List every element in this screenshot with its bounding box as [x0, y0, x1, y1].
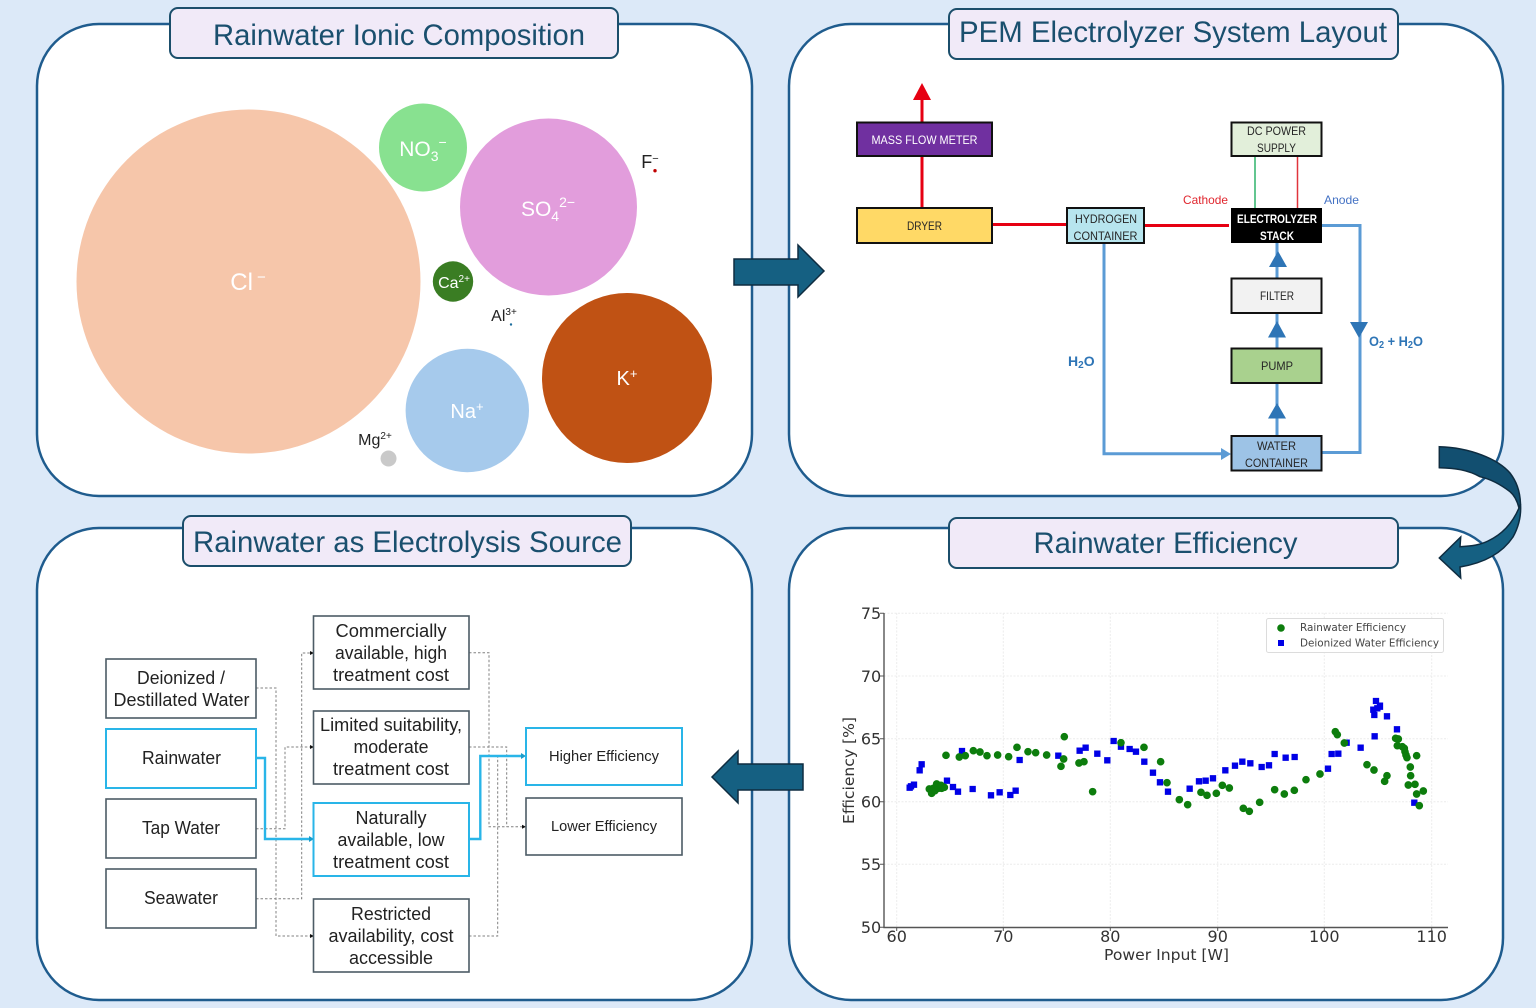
box: limited suitability: moderate: [354, 737, 428, 757]
scatter chart: [840, 604, 1448, 964]
legend: Rainwater Efficiency: [1300, 622, 1406, 634]
heading: Rainwater as Electrolysis Source: Rainwater as Electrolysis Source: [193, 526, 622, 559]
label: cathode: Cathode: [1183, 193, 1228, 207]
box: deionized water: Destillated Water: [114, 690, 250, 710]
heading: Rainwater as Electrolysis Source: [183, 516, 631, 566]
bubble: calcium: [433, 261, 473, 302]
box: deionized water: [106, 659, 256, 718]
box: commercially available: [314, 616, 469, 689]
heading: Rainwater Efficiency: [949, 518, 1398, 568]
box: dryer: [857, 208, 992, 243]
label: H2O: O: [1084, 353, 1095, 369]
box: mass flow meter: MASS FLOW METER: [872, 133, 978, 147]
panel: rainwater efficiency: [789, 518, 1503, 1000]
label: O2 + H2O: O: [1413, 333, 1423, 349]
x tick labels: 80: [1100, 927, 1120, 946]
axes: [880, 613, 1448, 931]
bubble: fluoride: F: [641, 152, 652, 172]
box: DC power supply: [1232, 122, 1322, 156]
bubble: magnesium: [358, 431, 396, 466]
label: O2 + H2O: + H: [1384, 333, 1408, 349]
bubble: sodium: [406, 349, 529, 472]
box: pump: PUMP: [1261, 359, 1293, 373]
x tick labels: 60: [887, 927, 907, 946]
label: anode: Anode: [1324, 193, 1359, 207]
y tick labels: 60: [861, 792, 881, 812]
bubble: calcium: Ca: [438, 275, 459, 292]
box: rainwater: Rainwater: [142, 748, 221, 768]
panel: PEM electrolyzer system layout: [789, 9, 1503, 496]
label: O2 + H2O: 2: [1379, 340, 1384, 351]
x tick labels: [887, 927, 1447, 946]
box: naturally available: treatment cost: [333, 852, 449, 872]
bubble: sodium: Na: [450, 401, 476, 423]
bubble: sulfate: [460, 118, 637, 296]
box: electrolyzer stack: [1231, 208, 1322, 243]
label: H2O: 2: [1078, 360, 1084, 371]
red hydrogen lines: [913, 83, 1229, 226]
y tick labels: 50: [861, 918, 881, 937]
bubble: fluoride: −: [652, 153, 659, 165]
box: limited suitability: Limited suitability,: [320, 715, 462, 735]
y tick labels: 70: [861, 667, 881, 686]
legend: Deionized Water Efficiency: [1300, 638, 1439, 650]
box: commercially available: treatment cost: [333, 665, 449, 685]
blue water lines: [1104, 226, 1360, 454]
arrow: efficiency to source: [712, 751, 803, 803]
bubble: sodium: +: [476, 399, 484, 414]
heading: Rainwater Ionic Composition: [170, 8, 618, 58]
arrow: layout to efficiency (curved): [1439, 447, 1521, 578]
box: naturally available: Naturally: [356, 808, 426, 828]
box: restricted availability: [314, 899, 469, 972]
flow arrowheads: [1221, 251, 1368, 460]
bubble: magnesium: 2+: [380, 431, 392, 442]
bubble: chloride: −: [257, 269, 266, 286]
highlighted connectors: [256, 753, 526, 842]
box: naturally available: [314, 803, 469, 876]
box: restricted availability: availability, cost: [328, 926, 454, 946]
box: deionized water: Deionized /: [137, 668, 225, 688]
dashed connectors: [256, 651, 526, 938]
box: DC power supply: DC POWER: [1247, 124, 1306, 138]
box: water container: [1232, 436, 1322, 470]
heading: Rainwater Efficiency: Rainwater Efficiency: [1034, 527, 1298, 560]
bubble: nitrate: [379, 104, 467, 192]
bubble: fluoride: [641, 152, 659, 172]
bubble: magnesium: Mg: [358, 432, 380, 449]
deionized water points: [907, 738, 1163, 798]
rainwater points: [926, 733, 1164, 797]
y tick labels: 55: [861, 855, 881, 874]
box: filter: FILTER: [1260, 289, 1294, 303]
box: lower efficiency: [526, 798, 682, 855]
label: H2O: H: [1068, 353, 1078, 369]
box: pump: [1232, 348, 1322, 383]
y axis title: Efficiency [%]: [840, 717, 858, 824]
x tick labels: 90: [1208, 927, 1228, 946]
y tick labels: 65: [861, 730, 881, 748]
x tick labels: 70: [993, 927, 1013, 946]
bubble: potassium: [542, 293, 712, 463]
grid lines: [884, 613, 1448, 927]
box: tap water: [106, 799, 256, 858]
box: electrolyzer stack: STACK: [1260, 229, 1294, 243]
panel: rainwater as electrolysis source: [37, 516, 752, 1000]
box: dryer: DRYER: [907, 219, 942, 233]
bubble: nitrate: 3: [431, 148, 439, 164]
box: limited suitability: treatment cost: [333, 759, 449, 779]
box: higher efficiency: Higher Efficiency: [549, 749, 660, 765]
box: tap water: Tap Water: [142, 818, 220, 838]
box: hydrogen container: HYDROGEN: [1075, 212, 1137, 226]
bubble: nitrate: −: [439, 134, 447, 150]
y tick labels: [861, 604, 881, 937]
bubble: sulfate: 4: [551, 208, 559, 224]
bubble: chloride: Cl: [230, 269, 253, 296]
bubble: sulfate: SO: [521, 198, 551, 221]
y tick labels: 75: [861, 604, 881, 623]
bubble: nitrate: NO: [399, 138, 431, 161]
heading: PEM Electrolyzer System Layout: PEM Electrolyzer System Layout: [959, 16, 1388, 49]
bubble: potassium: +: [630, 366, 637, 381]
box: hydrogen container: CONTAINER: [1074, 229, 1138, 243]
x axis title: Power Input [W]: [1104, 946, 1229, 964]
legend: [1266, 618, 1444, 652]
box: water container: CONTAINER: [1245, 456, 1308, 470]
box: lower efficiency: Lower Efficiency: [551, 819, 658, 835]
heading: PEM Electrolyzer System Layout: [949, 9, 1398, 59]
bubble: calcium: 2+: [459, 274, 470, 285]
box: electrolyzer stack: ELECTROLYZER: [1237, 212, 1317, 226]
deionized water points continued: [1165, 698, 1417, 805]
label: O2 + H2O: 2: [1408, 340, 1413, 351]
x tick labels: 110: [1416, 927, 1447, 946]
box: limited suitability: [314, 711, 469, 784]
bubble: chloride: [76, 110, 420, 454]
box: higher efficiency: [526, 728, 682, 785]
bubble: aluminium: Al: [491, 308, 505, 325]
bubble: aluminium: [491, 307, 517, 326]
arrow: composition to layout: [734, 245, 824, 297]
box: naturally available: available, low: [338, 830, 445, 850]
box: mass flow meter: [857, 122, 992, 156]
box: rainwater: [106, 729, 256, 788]
box: water container: WATER: [1257, 439, 1296, 453]
heading: Rainwater Ionic Composition: Rainwater Ionic Composition: [213, 19, 585, 52]
bubble: potassium: K: [617, 368, 630, 390]
label: O2 + H2O: O: [1369, 333, 1380, 349]
box: filter: [1232, 278, 1322, 313]
rainwater points continued: [1164, 728, 1427, 815]
box: restricted availability: Restricted: [351, 904, 431, 924]
box: DC power supply: SUPPLY: [1257, 141, 1296, 155]
bubble: sulfate: 2−: [559, 194, 575, 210]
box: commercially available: Commercially: [336, 621, 446, 641]
box: hydrogen container: [1067, 208, 1144, 243]
power leads: [1255, 156, 1298, 208]
box: commercially available: available, high: [335, 643, 447, 663]
box: seawater: [106, 869, 256, 928]
panel: rainwater ionic composition: [37, 8, 752, 496]
x tick labels: 100: [1309, 927, 1340, 946]
box: restricted availability: accessible: [349, 948, 433, 968]
bubble: aluminium: 3+: [505, 307, 517, 318]
box: seawater: Seawater: [144, 888, 218, 908]
